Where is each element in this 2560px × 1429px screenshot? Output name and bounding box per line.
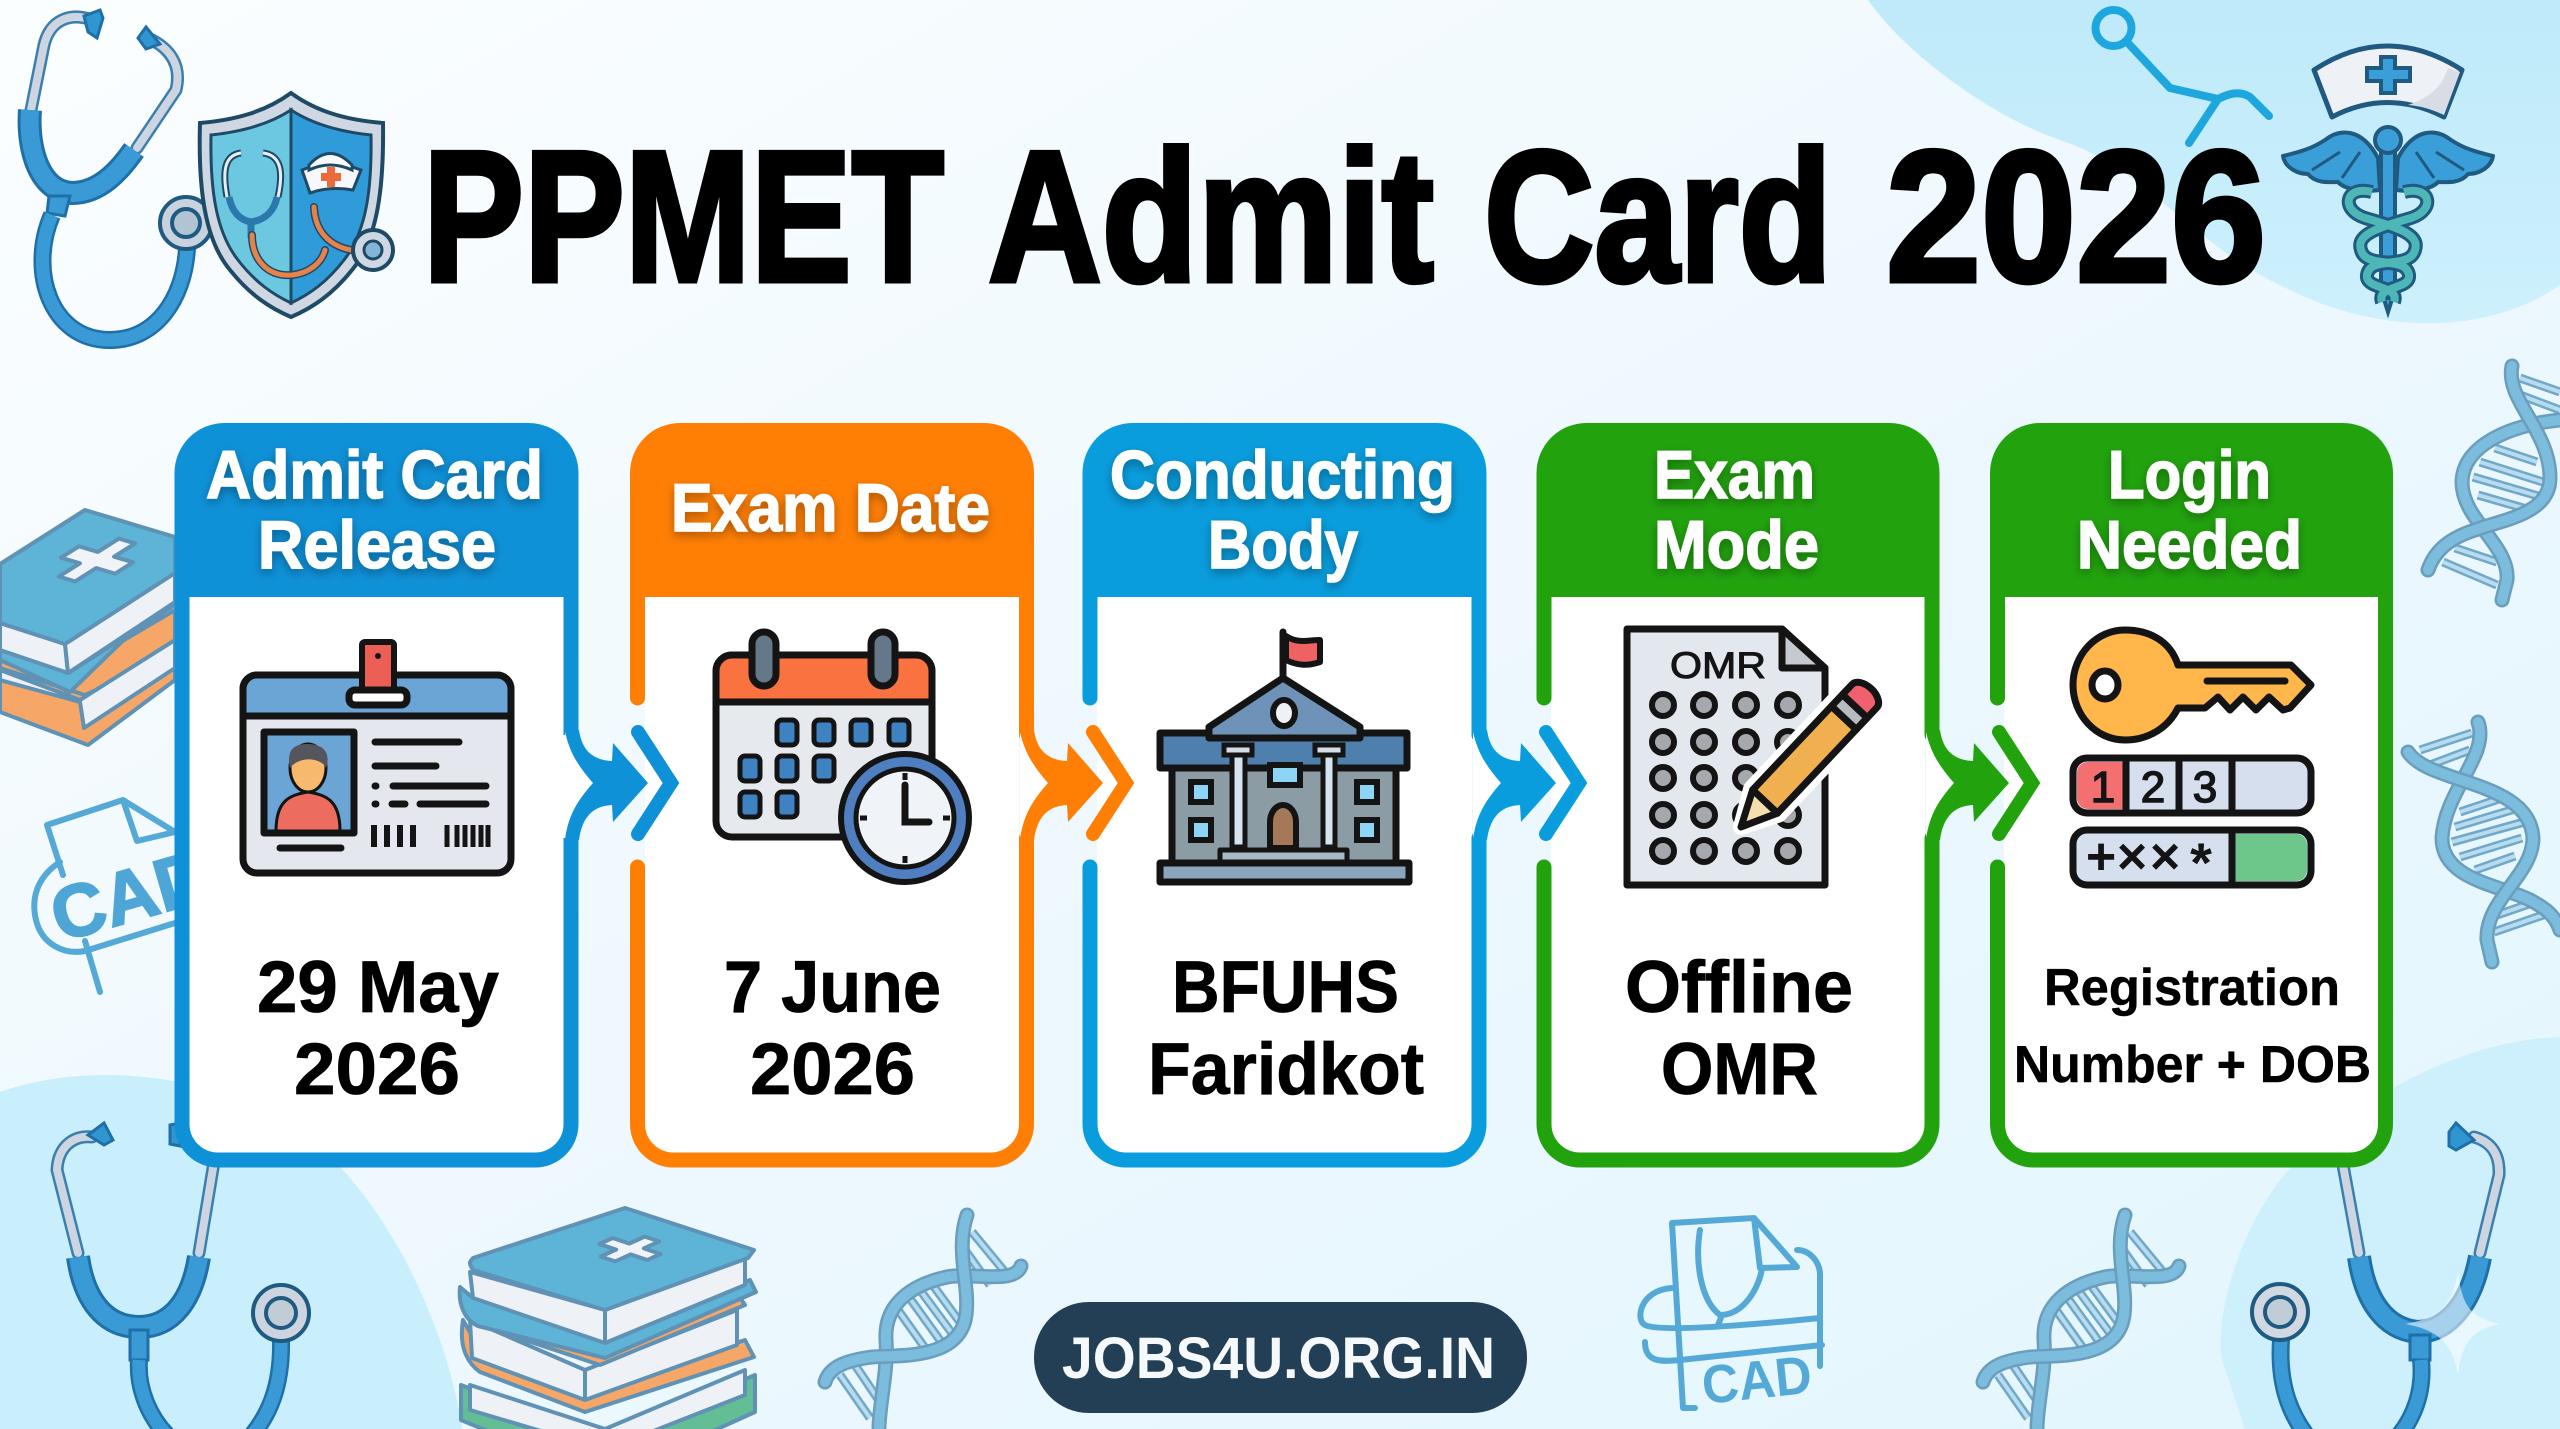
icon: CAD document left: CAD — [42, 833, 219, 957]
value: Registration — [2044, 959, 2340, 1017]
icon: key — [2073, 630, 2311, 740]
value — [257, 947, 499, 1110]
icon: stethoscope bottom right — [2252, 1123, 2499, 1429]
icon: DOB password field: × — [2150, 828, 2180, 886]
arrow: orange, card 2 to card 3 — [1020, 730, 1126, 840]
value — [2014, 959, 2371, 1094]
sparkle watermark — [2405, 1272, 2500, 1374]
icon: DOB password field: + — [2086, 828, 2116, 886]
card header — [1990, 423, 2393, 597]
icon: registration number field: 3 — [2193, 763, 2217, 812]
icon: OMR sheet with pencil: OMR — [1670, 645, 1766, 686]
panel: Admit Card Release — [174, 423, 578, 1160]
card border — [182, 597, 571, 1160]
title: PPMET — [423, 112, 944, 321]
arrow: blue, card 3 to card 4 — [1473, 730, 1579, 840]
icon: calendar with clock — [716, 632, 969, 882]
heading: Conducting — [1110, 437, 1455, 513]
title: Card — [1484, 112, 1832, 321]
value: Offline — [1625, 947, 1853, 1028]
card border — [1544, 597, 1932, 1160]
icon: DNA middle right — [2408, 722, 2560, 962]
value — [1148, 947, 1424, 1110]
icon: books left — [0, 510, 175, 745]
value: Number + DOB — [2014, 1036, 2371, 1094]
icon: nurse cap — [2314, 46, 2462, 117]
card border — [638, 597, 1026, 1160]
arrow: green, card 4 to card 5 — [1926, 730, 2032, 840]
card border — [1998, 597, 2386, 1160]
card header — [1536, 423, 1940, 597]
card border — [1090, 597, 1479, 1160]
heading — [2077, 437, 2302, 583]
icon: DNA bottom left — [825, 1215, 1021, 1427]
panel: Login Needed — [1990, 423, 2393, 1160]
icon: DOB password field: × — [2117, 828, 2147, 886]
heading: Body — [1208, 507, 1358, 583]
value — [1625, 947, 1853, 1110]
panel: Exam Mode — [1536, 423, 1940, 1160]
icon: caduceus — [2283, 127, 2493, 312]
icon: DNA upper right — [2428, 366, 2560, 600]
value: 29 May — [257, 947, 499, 1028]
icon: ID card — [243, 642, 511, 873]
arrow: blue, card 1 to card 2 — [565, 730, 671, 840]
value: 2026 — [294, 1029, 460, 1110]
icon: registration number field: 2 — [2141, 763, 2165, 812]
icon: OMR sheet with pencil — [1627, 629, 1887, 885]
icon: university building — [1160, 632, 1409, 882]
heading: Exam — [1654, 437, 1815, 513]
title — [423, 112, 2266, 321]
pill: website: JOBS4U.ORG.IN — [1062, 1326, 1495, 1391]
icon: stethoscope top left — [30, 10, 212, 340]
heading: Login — [2108, 437, 2271, 513]
value — [724, 947, 941, 1110]
icon: scope outline — [2096, 10, 2269, 143]
panel: Conducting Body — [1082, 423, 1486, 1160]
icon: books bottom — [460, 1208, 756, 1429]
value: BFUHS — [1172, 947, 1399, 1028]
icon: DOB password field — [2073, 828, 2311, 894]
heading: Release — [258, 507, 496, 583]
title: Admit — [988, 112, 1434, 321]
value: Faridkot — [1148, 1029, 1424, 1110]
heading — [1654, 437, 1819, 583]
icon: CAD document bottom: CAD — [1699, 1345, 1815, 1416]
heading: Needed — [2077, 507, 2302, 583]
value: 2026 — [750, 1029, 915, 1110]
icon: DNA bottom right — [1983, 1215, 2179, 1427]
card header — [1082, 423, 1486, 597]
icon: registration number field: 1 — [2091, 763, 2115, 812]
value: 7 June — [724, 947, 941, 1028]
icon: CAD document bottom — [1640, 1218, 1822, 1416]
icon: shield — [200, 93, 393, 317]
icon: CAD document left — [34, 800, 219, 992]
title: 2026 — [1886, 112, 2266, 321]
icon: registration number field — [2073, 758, 2311, 813]
icon: DOB password field: * — [2190, 831, 2212, 894]
value: OMR — [1661, 1029, 1818, 1110]
heading: Admit Card — [206, 437, 543, 513]
heading — [1110, 437, 1455, 583]
card header — [174, 423, 578, 597]
panel: Exam Date — [630, 423, 1034, 1160]
heading: Exam Date — [671, 470, 990, 546]
heading: Mode — [1654, 507, 1819, 583]
card header — [630, 423, 1034, 597]
icon: stethoscope bottom left — [57, 1123, 309, 1429]
heading — [206, 437, 543, 583]
pill: website — [1034, 1302, 1527, 1413]
